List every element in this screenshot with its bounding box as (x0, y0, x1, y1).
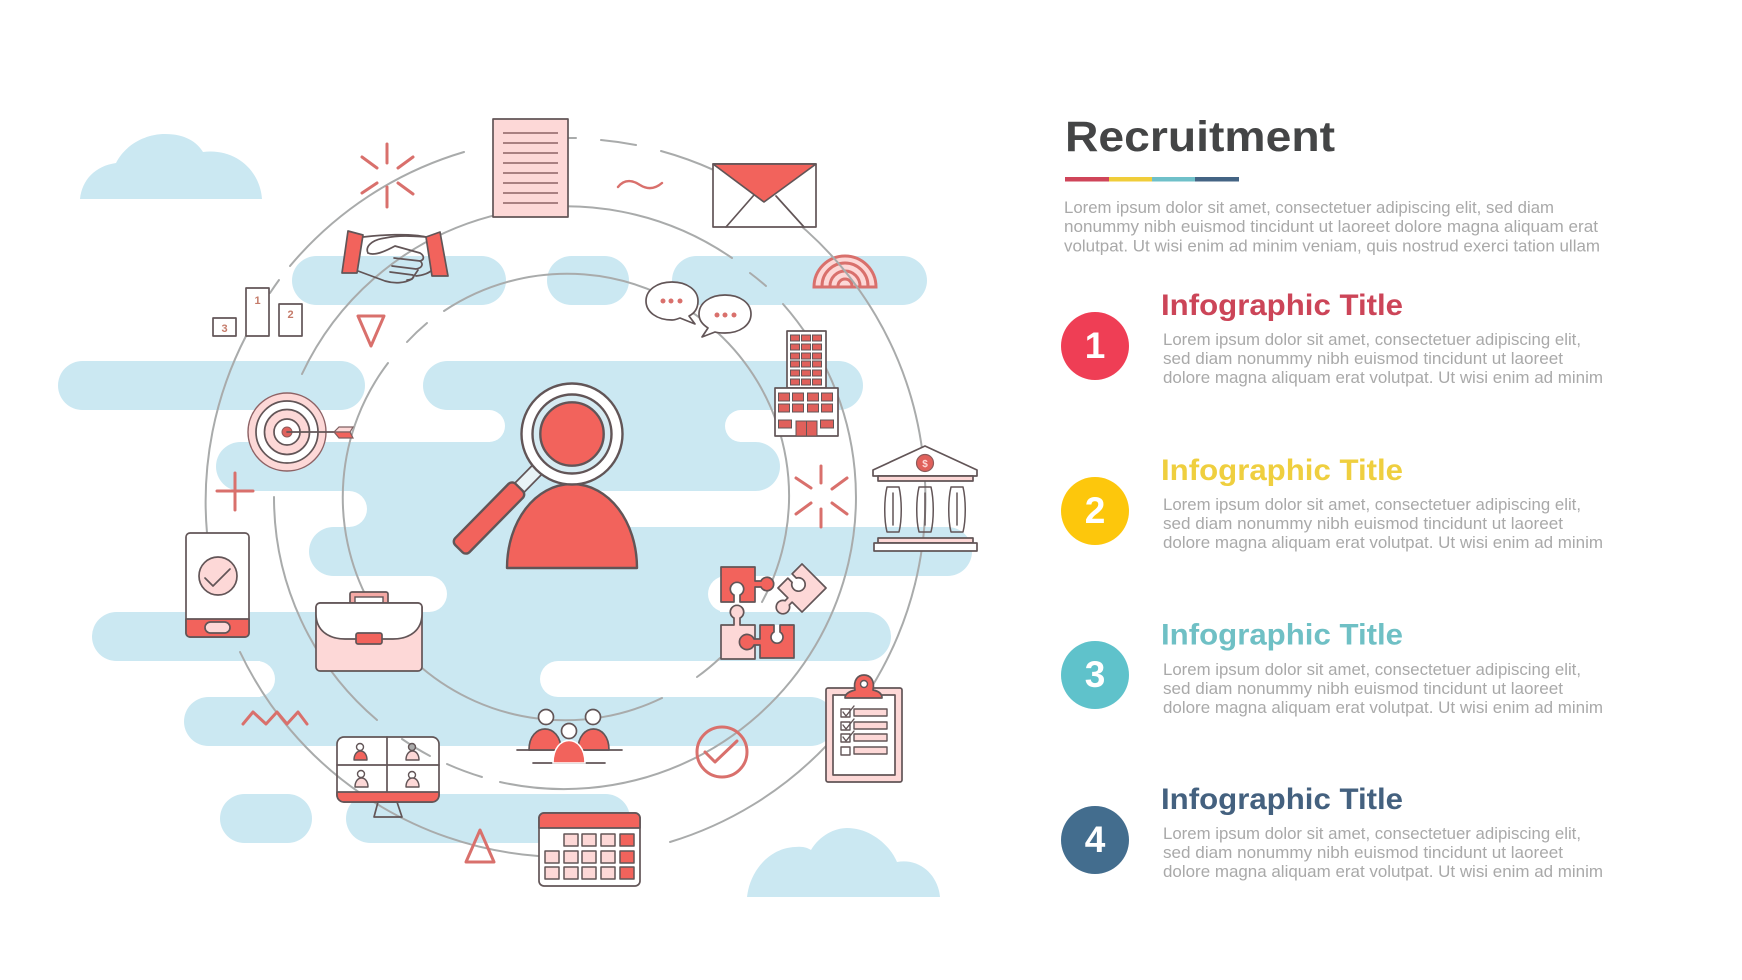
title: Recruitment (1065, 113, 1335, 161)
icon: puzzle pieces (721, 564, 826, 659)
item 2: 2 (1085, 490, 1105, 531)
icon: ranking bars: 2 (287, 309, 294, 321)
icon: ranking bars: 1 (254, 295, 261, 307)
item 4: Infographic Title (1161, 783, 1403, 816)
item 4: sed diam nonummy nibh euismod tincidunt ut laoreet (1163, 844, 1563, 862)
icon: wave mark (618, 181, 662, 188)
icon: video call monitor (337, 737, 439, 817)
item 3: sed diam nonummy nibh euismod tincidunt ut laoreet (1163, 680, 1563, 698)
item 3: Infographic Title (1161, 618, 1403, 652)
icon: sparkle right (796, 466, 847, 527)
title underline colour bar (1065, 177, 1239, 182)
item 2 (1061, 454, 1603, 552)
intro paragraph: nonummy nibh euismod tincidunt ut laoreet dolore magna aliquam erat (1064, 218, 1598, 236)
icon: bank (873, 446, 977, 551)
item 1 (1061, 289, 1603, 387)
item 3 (1061, 618, 1603, 717)
monitor screen backing (337, 737, 439, 797)
item 1: Infographic Title (1161, 289, 1403, 322)
item 4: 4 (1085, 819, 1106, 860)
item 2: sed diam nonummy nibh euismod tincidunt ut laoreet (1163, 515, 1563, 533)
item 3: 3 (1085, 654, 1105, 695)
icon: ranking bars (213, 288, 302, 336)
item 2: Lorem ipsum dolor sit amet, consectetuer adipiscing elit, (1163, 496, 1581, 514)
item 3: dolore magna aliquam erat volutpat. Ut wisi enim ad minim (1163, 699, 1603, 717)
item 3: Lorem ipsum dolor sit amet, consectetuer adipiscing elit, (1163, 661, 1581, 679)
icon: sparkle top left (362, 144, 413, 207)
intro paragraph: Lorem ipsum dolor sit amet, consectetuer adipiscing elit, sed diam (1064, 199, 1554, 217)
icon: office building (775, 331, 838, 436)
icon: triangle up (466, 830, 494, 862)
concentric dashed rings (206, 138, 925, 856)
icon: clipboard checklist (826, 675, 902, 782)
item 1: dolore magna aliquam erat volutpat. Ut wisi enim ad minim (1163, 369, 1603, 387)
icon: handshake (342, 231, 448, 283)
icon: smartphone with check (186, 533, 249, 637)
icon: speech bubbles (646, 282, 751, 337)
intro paragraph (1064, 199, 1600, 256)
icon: calendar (539, 813, 640, 886)
item 4 (1061, 783, 1603, 881)
item 4: Lorem ipsum dolor sit amet, consectetuer adipiscing elit, (1163, 825, 1581, 843)
item 1: Lorem ipsum dolor sit amet, consectetuer adipiscing elit, (1163, 331, 1581, 349)
item 1: sed diam nonummy nibh euismod tincidunt ut laoreet (1163, 350, 1563, 368)
item 2: dolore magna aliquam erat volutpat. Ut wisi enim ad minim (1163, 534, 1603, 552)
item 4: dolore magna aliquam erat volutpat. Ut wisi enim ad minim (1163, 863, 1603, 881)
icon: rainbow signal (814, 256, 876, 287)
icon: envelope (713, 164, 816, 227)
icon: team of people (517, 710, 622, 763)
intro paragraph: volutpat. Ut wisi enim ad minim veniam, quis nostrud exerci tation ullam (1064, 238, 1600, 256)
icon: briefcase (316, 592, 422, 671)
icon: bank: $ (922, 459, 928, 470)
icon: triangle down (358, 316, 384, 346)
icon: central person with magnifier (452, 384, 637, 568)
icon: ranking bars: 3 (221, 323, 228, 335)
icon: plus mark (217, 473, 253, 510)
background: clouds and pale blue bands (0, 134, 1125, 897)
icon: target with arrow (248, 393, 353, 471)
item 2: Infographic Title (1161, 454, 1403, 487)
icon: zigzag mark (243, 712, 307, 724)
item 1: 1 (1085, 325, 1105, 366)
icon: check circle (697, 727, 747, 777)
icon: document (493, 119, 568, 217)
